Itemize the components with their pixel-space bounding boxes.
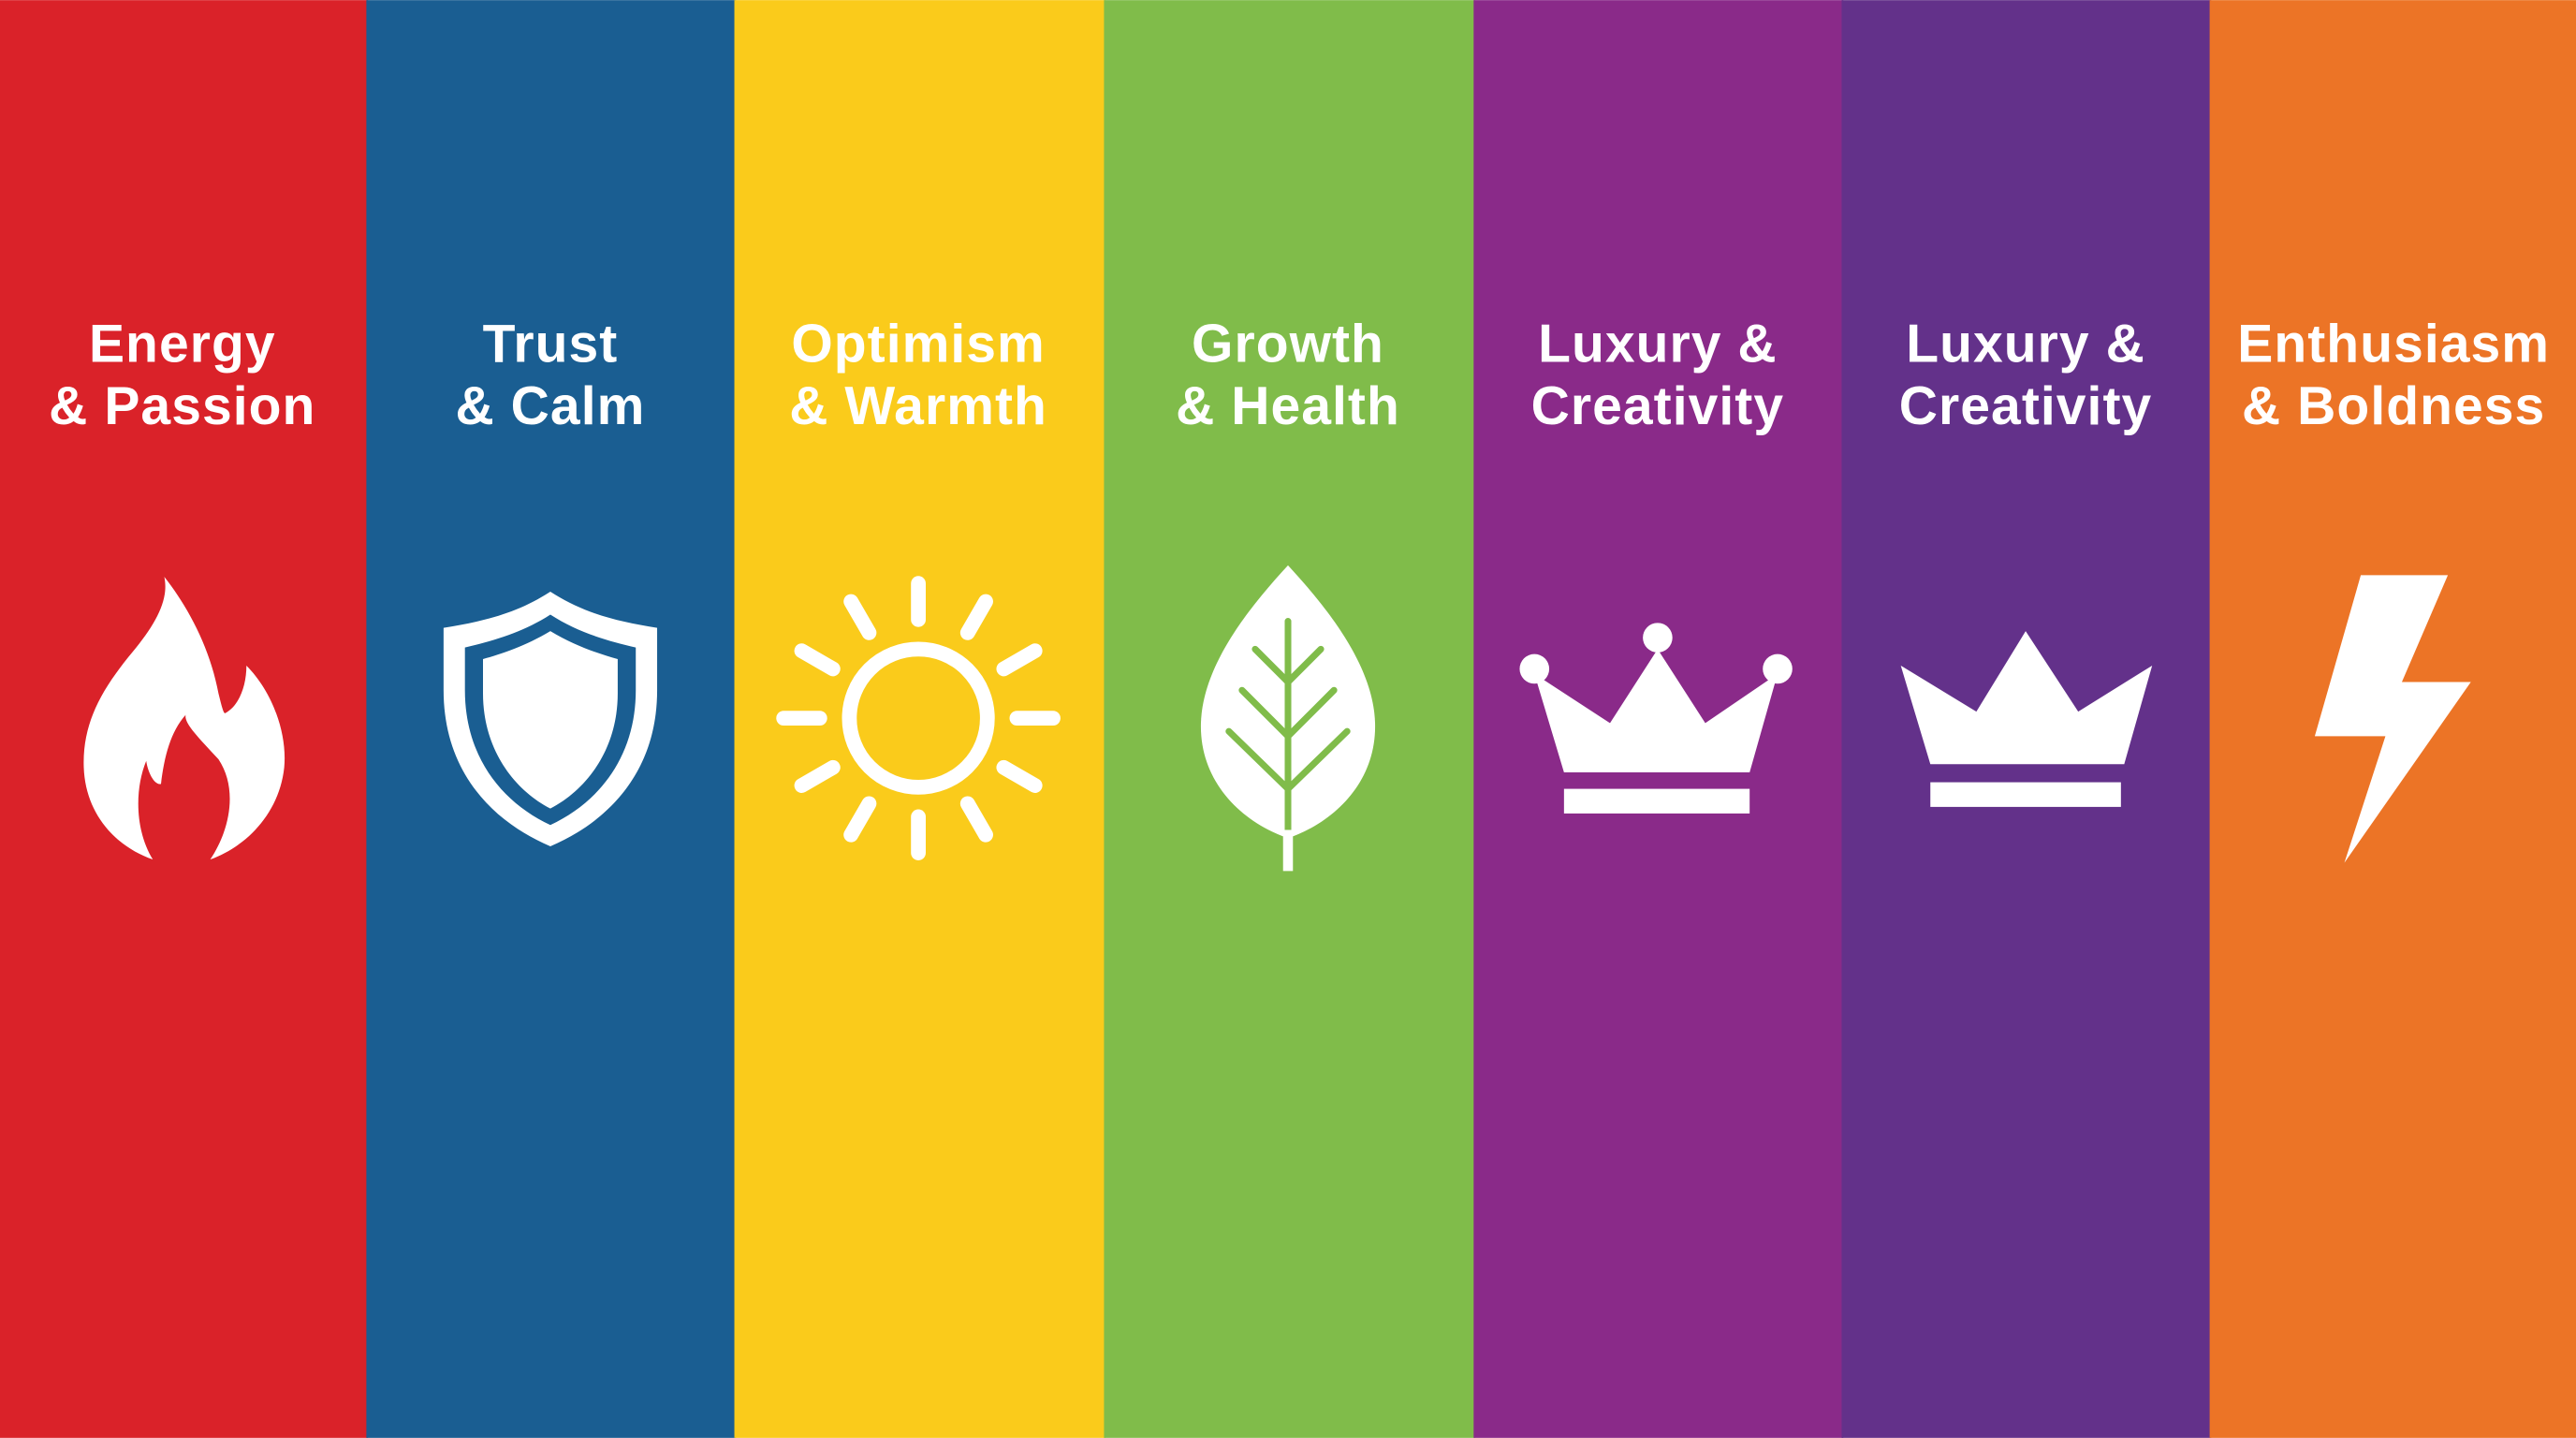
heading: growth: Growth xyxy=(1192,314,1384,374)
heading: luxury 1 xyxy=(1531,314,1784,436)
icon: crown xyxy=(1901,631,2152,807)
panel: yellow optimism xyxy=(735,0,1105,1438)
icon: sun xyxy=(783,583,1053,853)
heading: growth: & Health xyxy=(1176,376,1400,436)
heading: energy: Energy xyxy=(89,314,276,374)
heading: luxury 1: Creativity xyxy=(1531,376,1784,436)
panel: red energy xyxy=(0,0,368,1438)
heading: trust xyxy=(456,314,645,436)
panel: purple luxury 1 xyxy=(1473,0,1843,1438)
icon: crown with balls xyxy=(1519,623,1793,814)
icon: leaf xyxy=(1201,565,1375,871)
heading: luxury 2 xyxy=(1899,314,2152,436)
panel: orange enthusiasm xyxy=(2210,0,2576,1438)
heading: enthusiasm: & Boldness xyxy=(2242,376,2545,436)
heading: optimism xyxy=(789,314,1047,436)
icon: flame xyxy=(83,577,285,859)
heading: enthusiasm xyxy=(2237,314,2550,436)
panel: green growth xyxy=(1104,0,1475,1438)
heading: growth xyxy=(1176,314,1400,436)
icon: shield xyxy=(444,592,657,846)
heading: optimism: & Warmth xyxy=(789,376,1047,436)
heading: trust: Trust xyxy=(483,314,618,374)
heading: energy: & Passion xyxy=(49,376,315,436)
heading: optimism: Optimism xyxy=(791,314,1046,374)
heading: enthusiasm: Enthusiasm xyxy=(2237,314,2550,374)
heading: luxury 2: Creativity xyxy=(1899,376,2152,436)
heading: trust: & Calm xyxy=(456,376,645,436)
heading: luxury 1: Luxury & xyxy=(1538,314,1778,374)
panel: blue trust xyxy=(366,0,736,1438)
heading: luxury 2: Luxury & xyxy=(1906,314,2145,374)
icon: lightning bolt xyxy=(2315,575,2471,863)
heading: energy xyxy=(49,314,315,436)
panel: purple luxury 2 xyxy=(1841,0,2211,1438)
